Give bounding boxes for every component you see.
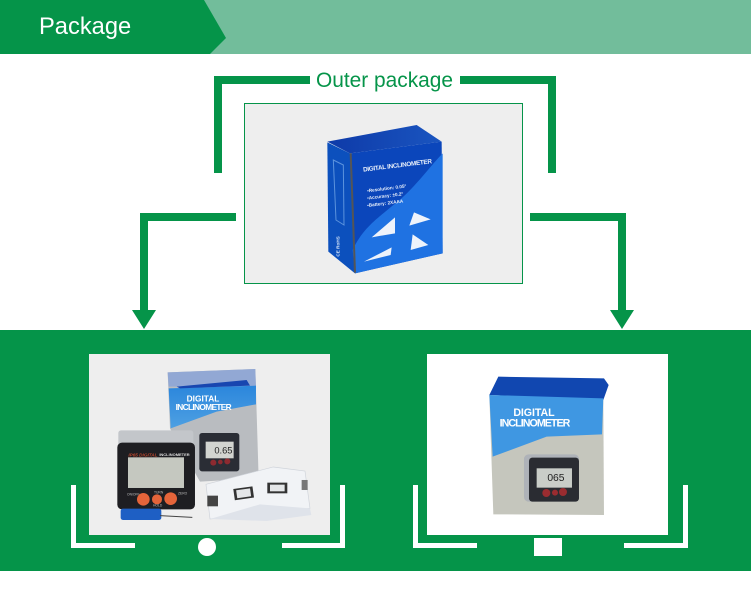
inclinometer: HOLD [153,504,163,508]
inclinometer: ON/OFF [127,492,140,496]
device on box: 065 [547,473,565,484]
header banner [0,0,751,54]
manual [206,467,311,521]
inclinometer: INCLINOMETER [159,452,190,457]
box specs: •Accuracy: ±0.2° [367,191,404,201]
product: blue box: CE RoHS [335,236,340,257]
inclinometer: ZERO [178,491,188,495]
inclinometer: TURN [154,491,164,495]
screwdriver [121,509,192,520]
box specs [367,184,407,208]
icon: white rectangle [534,538,562,556]
panel: contents photo [89,354,330,535]
product: retail box front [489,377,609,515]
icon: white circle [198,538,216,556]
arrow: to left [132,213,236,329]
heading: Package: Package [39,14,131,40]
inclinometer [117,430,195,509]
frame: left corner brackets [71,485,345,548]
product: blue box [327,125,443,273]
arrow: to right [530,213,634,329]
product: retail box front: INCLINOMETER [500,417,571,429]
retail box: 0.65 [214,446,232,456]
panel: green band [0,330,751,571]
connector: right bracket [460,76,556,173]
retail box: DIGITAL [187,394,219,404]
box specs: •Resolution: 0.05° [367,184,407,193]
box title: DIGITAL INCLINOMETER [363,158,433,174]
box title: DIGITAL [513,407,555,419]
product: retail box, inclinometer, screwdriver and manual [117,369,311,521]
retail box [168,369,259,482]
retail box: INCLINOMETER [176,402,232,412]
box specs: •Battery: 2XAAA [367,199,404,208]
box triangles [364,212,431,262]
connector: left bracket [214,76,310,173]
panel: outer package photo [244,104,522,284]
panel: retail box photo [427,354,668,535]
frame: right corner brackets [413,485,688,548]
inclinometer: IP65 DIGITAL [128,452,158,457]
heading: Outer package: Outer package [316,69,453,92]
